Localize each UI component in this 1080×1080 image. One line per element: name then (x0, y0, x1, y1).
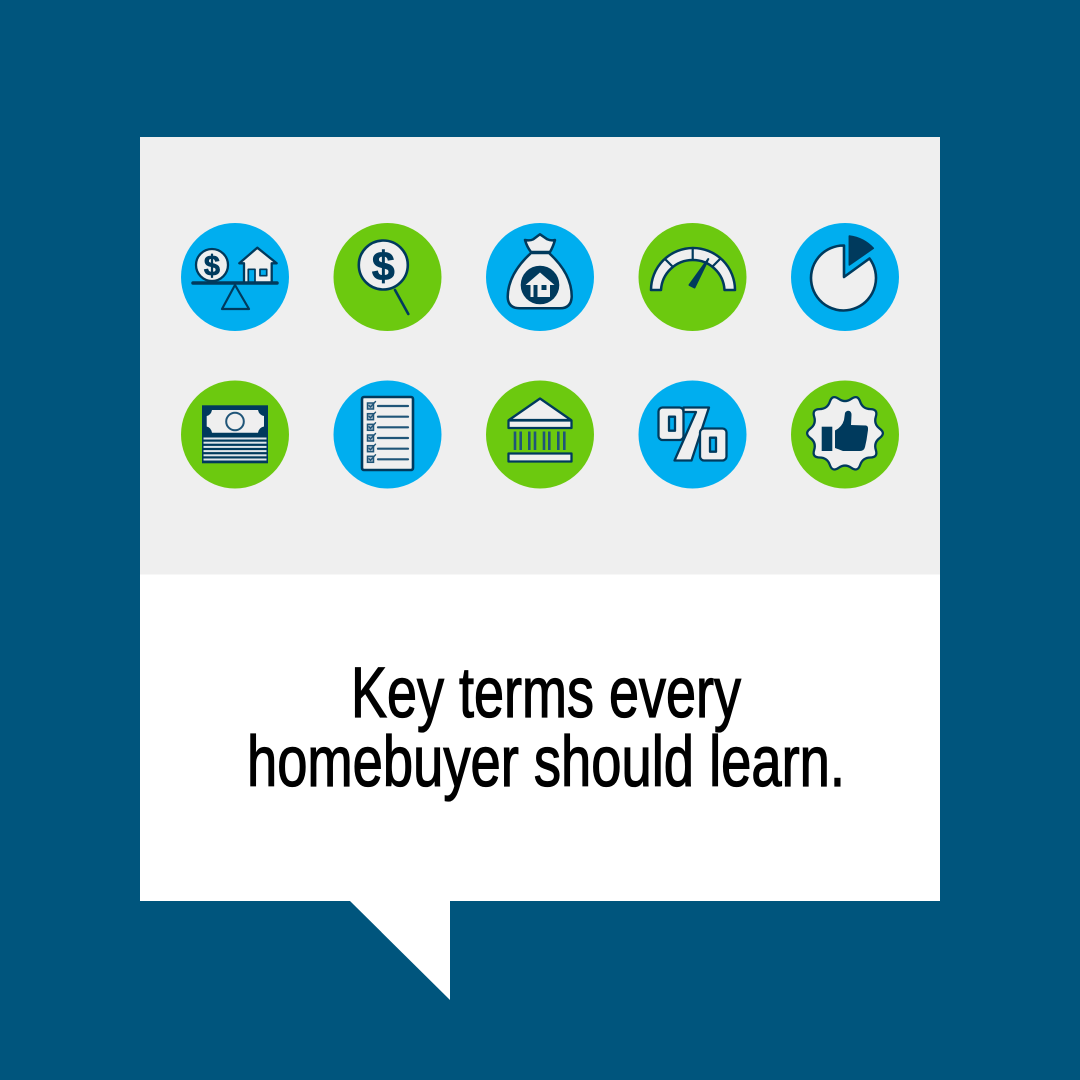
speech bubble (140, 137, 940, 1000)
heading: Key terms every (351, 654, 741, 733)
icon: magnifying glass with dollar: $ (372, 243, 395, 289)
icon: magnifying glass with dollar (334, 223, 442, 331)
icon: percent sign (638, 380, 746, 488)
icon: balance of money and house: $ (204, 250, 220, 282)
icon: stack of bills (181, 380, 289, 488)
icon: checklist (334, 380, 442, 488)
icon: credit score gauge (638, 223, 746, 331)
icon: balance of money and house (181, 223, 289, 331)
heading: homebuyer should learn. (247, 723, 845, 802)
icon: money bag with house (486, 223, 594, 331)
speech bubble tail (350, 901, 450, 1000)
icon: pie chart (791, 223, 899, 331)
heading (247, 654, 845, 802)
panel: text area (140, 574, 940, 901)
panel: icon area (140, 137, 940, 574)
icon: thumbs up badge (791, 380, 899, 488)
icon: bank building (486, 380, 594, 488)
